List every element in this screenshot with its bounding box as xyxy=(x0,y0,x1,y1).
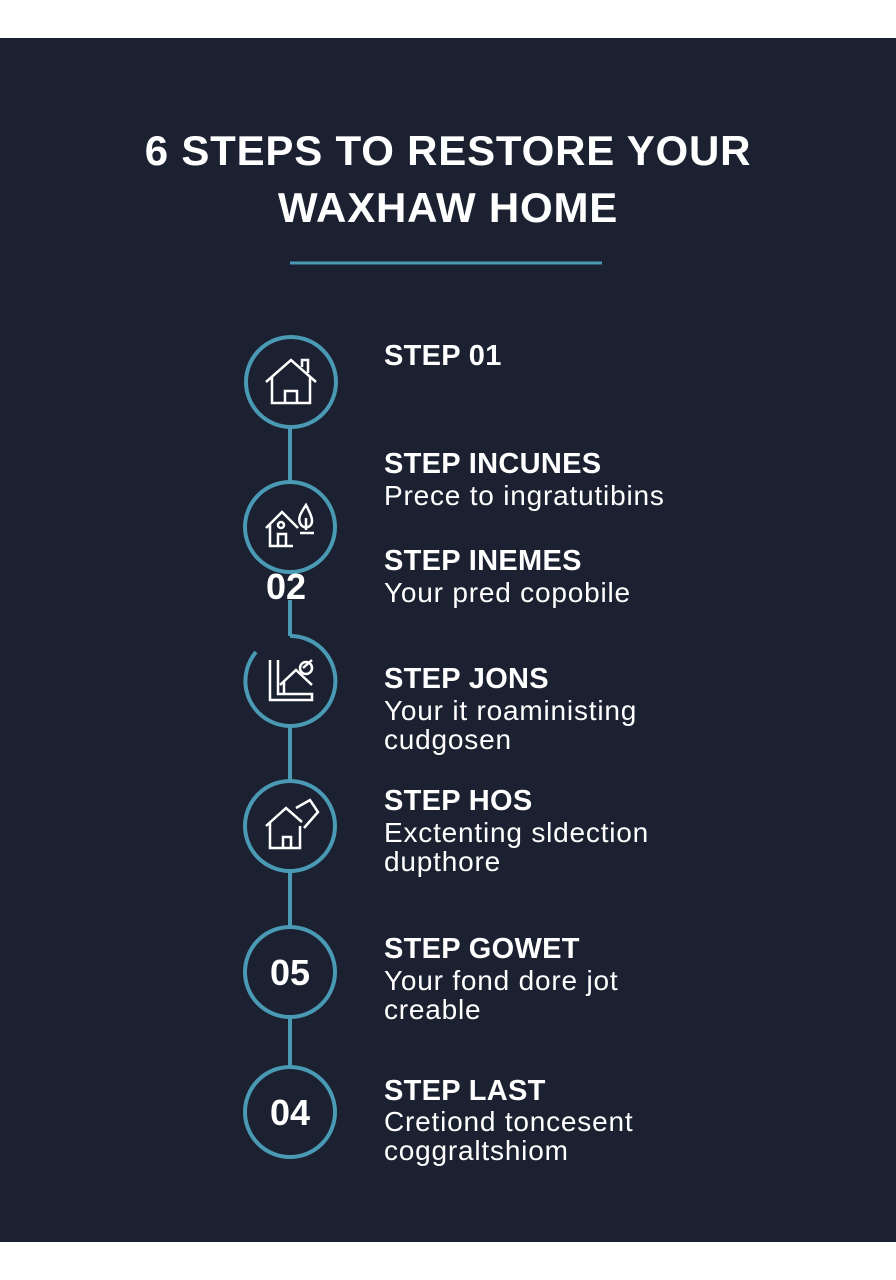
step 7 text: Cretiond toncesent xyxy=(384,1106,633,1137)
step 5 text: Exctenting sldection xyxy=(384,817,649,848)
step 6: STEP GOWET xyxy=(384,933,580,965)
step 7 text xyxy=(384,1106,633,1166)
step 5 text xyxy=(384,817,649,877)
title: 6 STEPS TO RESTORE YOUR xyxy=(145,127,751,174)
step 2 text: Prece to ingratutibins xyxy=(384,480,665,511)
timeline graphic: 02 xyxy=(266,566,306,607)
title xyxy=(145,127,751,231)
step 7: STEP LAST xyxy=(384,1075,546,1107)
step 4 text: Your it roaministing xyxy=(384,695,637,726)
step 5 text: dupthore xyxy=(384,846,501,877)
step 4: STEP JONS xyxy=(384,663,549,695)
step 6 text: Your fond dore jot xyxy=(384,965,618,996)
step 4 text xyxy=(384,695,637,755)
step 3 text: Your pred copobile xyxy=(384,577,631,608)
step 4 text: cudgosen xyxy=(384,724,512,755)
step 6 text xyxy=(384,965,618,1025)
step 6 text: creable xyxy=(384,994,481,1025)
timeline graphic: 04 xyxy=(270,1092,310,1133)
step 5: STEP HOS xyxy=(384,785,533,817)
step 1: STEP 01 xyxy=(384,340,502,372)
title: WAXHAW HOME xyxy=(278,184,618,231)
timeline graphic: 05 xyxy=(270,952,310,993)
step 2: STEP INCUNES xyxy=(384,448,601,480)
step 7 text: coggraltshiom xyxy=(384,1135,569,1166)
step 3: STEP INEMES xyxy=(384,545,582,577)
